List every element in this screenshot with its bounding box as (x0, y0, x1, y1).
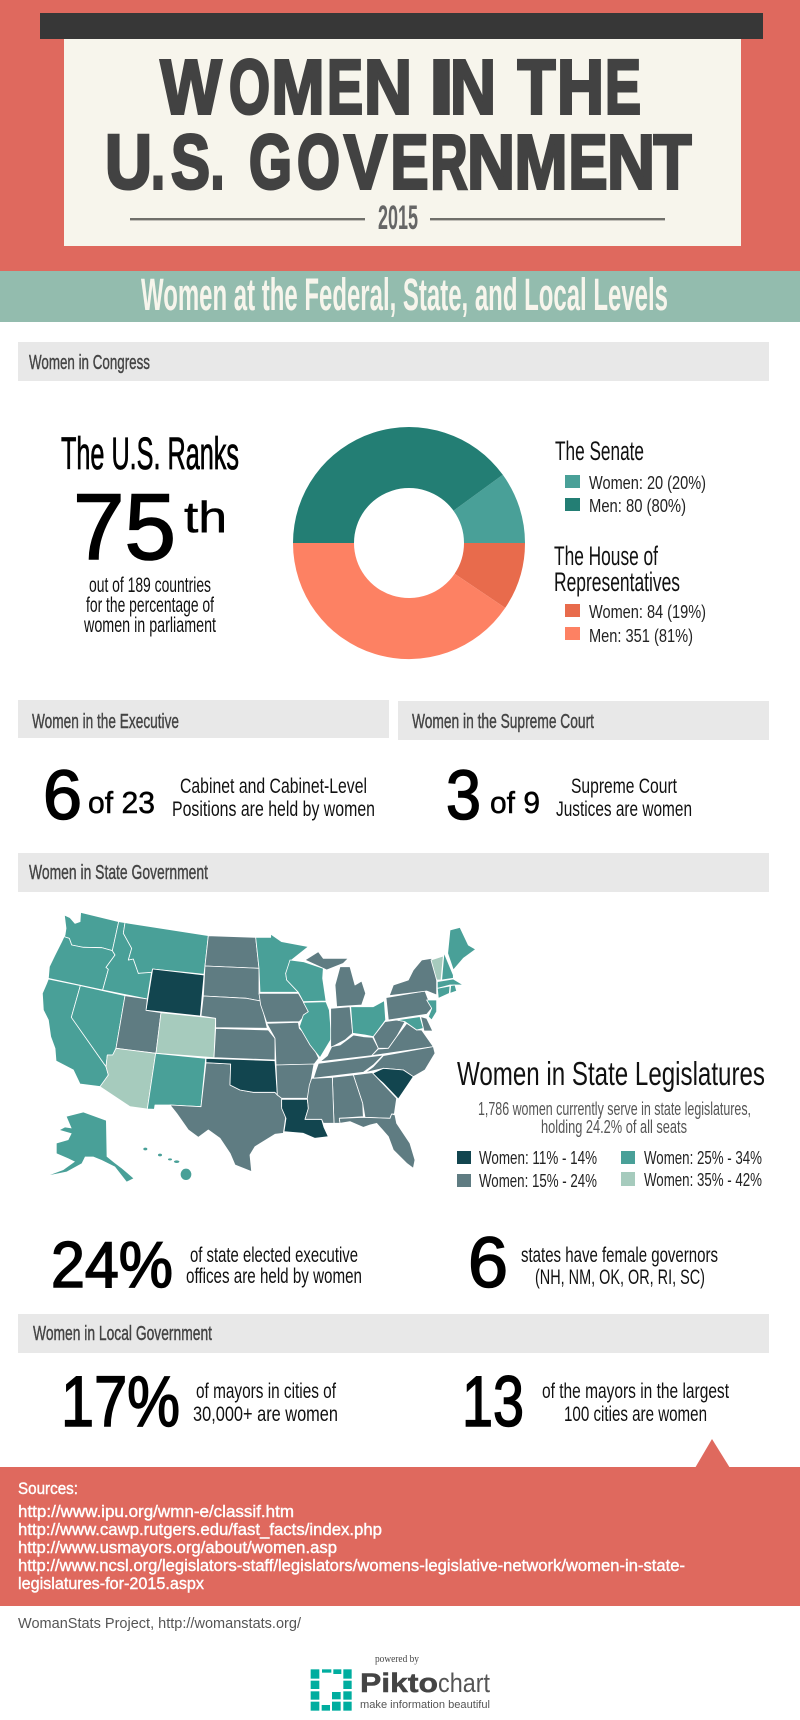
state legislatures heading (457, 1055, 765, 1137)
title: T (654, 120, 692, 206)
stat: largest cities: 13 (462, 1363, 524, 1442)
womanstats credit: WomanStats Project, http://womanstats.org/ (18, 1615, 302, 1632)
legend: house: Women: 84 (19%) (589, 602, 706, 622)
title: E (390, 120, 428, 206)
stat: justices: Supreme Court (571, 775, 677, 798)
title: O (297, 120, 340, 206)
map legend (457, 1148, 762, 1191)
sources panel: http://www.cawp.rutgers.edu/fast_facts/index.php (18, 1520, 382, 1539)
legend: senate (555, 436, 706, 516)
rank callout (61, 428, 239, 637)
title: T (518, 44, 556, 130)
header banner (0, 0, 800, 271)
legend: house: Representatives (554, 567, 680, 597)
section heading: supreme court: Women in the Supreme Court (412, 711, 594, 733)
section heading: supreme court (398, 701, 769, 740)
sources panel (0, 1439, 800, 1606)
title: E (327, 44, 363, 130)
map legend: Women: 35% - 42% (644, 1170, 762, 1190)
legend: senate: Women: 20 (20%) (589, 473, 706, 493)
stat: cabinet: Cabinet and Cabinet-Level (180, 775, 367, 798)
stat: largest cities (462, 1363, 729, 1442)
title: N (607, 120, 655, 206)
title: S (171, 120, 210, 206)
title: E (568, 120, 608, 206)
piktochart footer: Pikto (360, 1668, 438, 1698)
stat: executive offices (51, 1228, 362, 1301)
piktochart footer: make information beautiful (360, 1699, 490, 1711)
stat: justices (446, 756, 692, 834)
title: H (557, 44, 604, 130)
legend: senate: The Senate (555, 436, 644, 466)
section heading: women in congress (18, 342, 769, 381)
sources panel: http://www.ipu.org/wmn-e/classif.htm (18, 1502, 294, 1521)
title: O (229, 44, 270, 130)
state legislatures heading: holding 24.2% of all seats (541, 1117, 687, 1137)
title: . (210, 120, 224, 206)
section heading: state government (18, 853, 769, 892)
stat: largest cities: 100 cities are women (564, 1403, 707, 1426)
map legend: Women: 11% - 14% (479, 1148, 597, 1168)
legend: house: The House of (554, 541, 658, 571)
stat: cabinet: of 23 (88, 785, 155, 820)
title: . (151, 120, 165, 206)
stat: mayors 30,000+: 17% (61, 1363, 180, 1442)
stat: justices: Justices are women (556, 798, 692, 821)
donut chart (293, 427, 525, 659)
rank callout: out of 189 countries (89, 574, 211, 597)
stat: governors (468, 1224, 718, 1303)
stat: mayors 30,000+: 30,000+ are women (193, 1403, 338, 1426)
title: M (514, 120, 568, 206)
stat: governors: states have female governors (521, 1244, 718, 1267)
sources panel: http://www.ncsl.org/legislators-staff/legislators/womens-legislative-network/women-in-state- (18, 1556, 685, 1575)
title: I (429, 44, 454, 130)
map legend: Women: 25% - 34% (644, 1148, 762, 1168)
legend: senate: Men: 80 (80%) (589, 496, 686, 516)
legend: house (554, 541, 706, 646)
map legend: Women: 15% - 24% (479, 1171, 597, 1191)
sources panel: legislatures-for-2015.aspx (18, 1574, 204, 1593)
legend: house: Men: 351 (81%) (589, 626, 693, 646)
stat: governors: (NH, NM, OK, OR, RI, SC) (535, 1266, 705, 1289)
rank callout: The U.S. Ranks (61, 428, 239, 479)
section heading: executive (18, 700, 389, 738)
title card (64, 39, 741, 246)
stat: justices: of 9 (490, 785, 540, 820)
icon: piktochart logo (311, 1669, 352, 1711)
title: E (605, 44, 641, 130)
title: W (160, 44, 222, 130)
piktochart footer: powered by (375, 1654, 419, 1665)
stat: governors: 6 (468, 1224, 508, 1303)
stat: executive offices: offices are held by women (186, 1265, 362, 1288)
title: U (105, 120, 152, 206)
rank callout: th (184, 493, 227, 542)
stat: cabinet: 6 (43, 756, 82, 834)
sources panel: http://www.usmayors.org/about/women.asp (18, 1538, 337, 1557)
title: N (467, 120, 515, 206)
stat: justices: 3 (446, 756, 481, 834)
year with rules: 2015 (378, 199, 418, 237)
stat: mayors 30,000+: of mayors in cities of (196, 1380, 336, 1403)
section heading: executive: Women in the Executive (32, 711, 179, 733)
us map (42, 912, 476, 1182)
stat: executive offices: 24% (51, 1228, 173, 1301)
sources panel: Sources: (18, 1479, 78, 1498)
rank callout: for the percentage of (86, 594, 214, 617)
piktochart footer (311, 1654, 490, 1711)
title: M (272, 44, 324, 130)
title: G (249, 120, 292, 206)
title: N (364, 44, 412, 130)
rank callout: 75 (73, 474, 176, 579)
title (105, 44, 692, 206)
stat: mayors 30,000+ (61, 1363, 338, 1442)
section heading: women in congress: Women in Congress (29, 352, 150, 374)
stat: executive offices: of state elected executive (190, 1244, 358, 1267)
rank callout: women in parliament (83, 614, 216, 637)
stat: cabinet (43, 756, 375, 834)
section heading: local government: Women in Local Government (33, 1323, 212, 1345)
piktochart footer: chart (438, 1668, 490, 1698)
section heading: state government: Women in State Government (29, 862, 208, 884)
title: N (450, 44, 496, 130)
stat: cabinet: Positions are held by women (172, 798, 375, 821)
dark top bar (40, 13, 763, 39)
stat: largest cities: of the mayors in the largest (542, 1380, 729, 1403)
title: V (344, 120, 387, 206)
section heading: local government (18, 1314, 769, 1353)
title: R (430, 120, 468, 206)
